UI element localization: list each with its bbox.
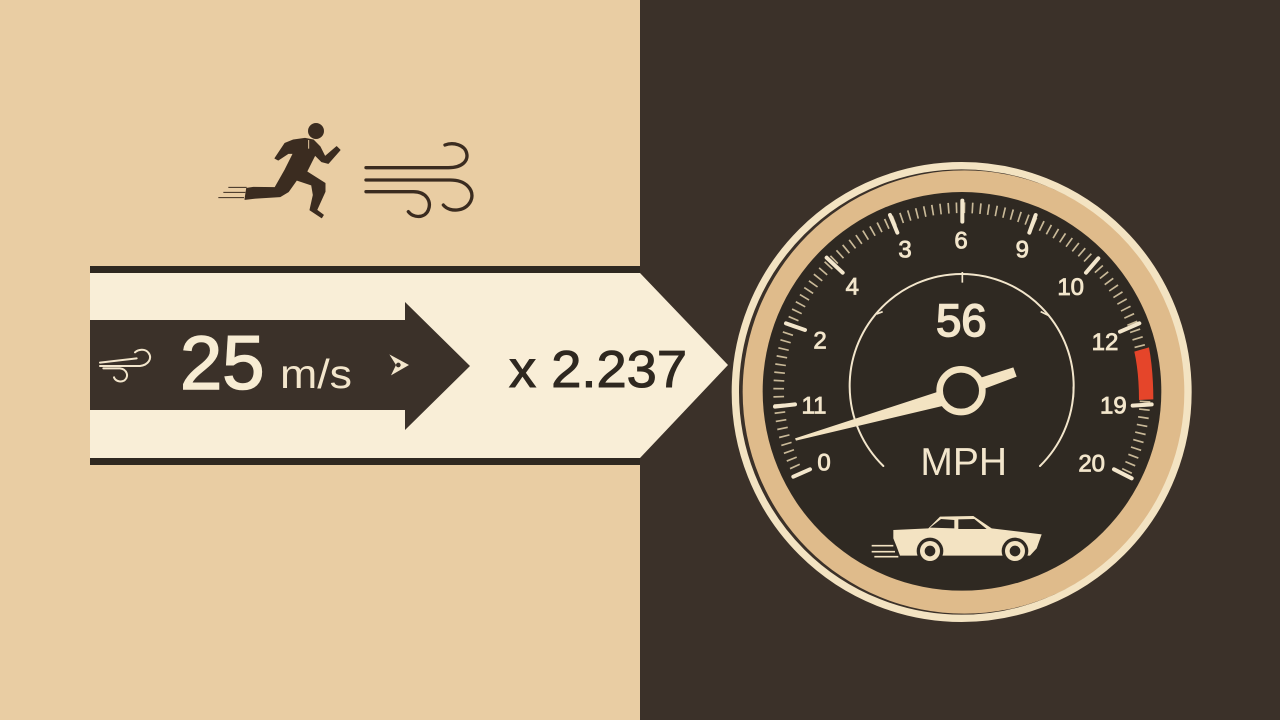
speedometer gauge: [735, 166, 1188, 618]
panel: left tan background: [0, 0, 640, 720]
icon: small wind: [100, 350, 150, 381]
gauge: scale labels: 4: [846, 274, 859, 301]
gauge: inner arc: [850, 272, 1074, 466]
gauge: scale labels: 2: [813, 328, 827, 355]
gauge: red zone: [1134, 347, 1153, 400]
gauge: scale labels: 10: [1057, 274, 1084, 301]
gauge: scale labels: 9: [1016, 236, 1029, 263]
gauge: scale labels: 20: [1078, 450, 1105, 477]
gauge: scale labels: 3: [898, 236, 912, 263]
icon: wind lines: [366, 144, 472, 216]
band: bottom dark border: [90, 458, 640, 465]
value: 56: 56: [936, 295, 987, 346]
band: top dark border: [90, 266, 640, 273]
gauge: major ticks: [775, 201, 1152, 478]
icon: car: [872, 516, 1042, 564]
icon: running person: [218, 123, 340, 218]
gauge: dial face: [763, 192, 1161, 591]
gauge: scale labels: 11: [802, 393, 826, 420]
band: dark input arrow: [90, 302, 470, 430]
text: multiplier: x 2.237: [509, 341, 687, 399]
gauge: scale labels: 19: [1100, 393, 1127, 420]
conversion band: [90, 266, 728, 465]
unit: MPH: MPH: [920, 441, 1007, 484]
gauge: outer cream ring: [735, 166, 1188, 618]
gauge: scale labels: 12: [1092, 329, 1118, 356]
gauge: minor ticks: [779, 208, 1145, 474]
gauge: scale labels: [802, 227, 1127, 477]
value: 25: 25: [180, 321, 265, 406]
band: cream arrow: [90, 273, 728, 458]
gauge: tan bezel: [743, 170, 1186, 614]
gauge: needle: [795, 367, 1017, 441]
icon: small arrowhead: [389, 354, 409, 375]
gauge: scale labels: 0: [817, 449, 831, 476]
panel: right dark background: [640, 0, 1280, 720]
gauge: scale labels: 6: [954, 227, 968, 254]
unit: m/s: m/s: [280, 351, 352, 397]
